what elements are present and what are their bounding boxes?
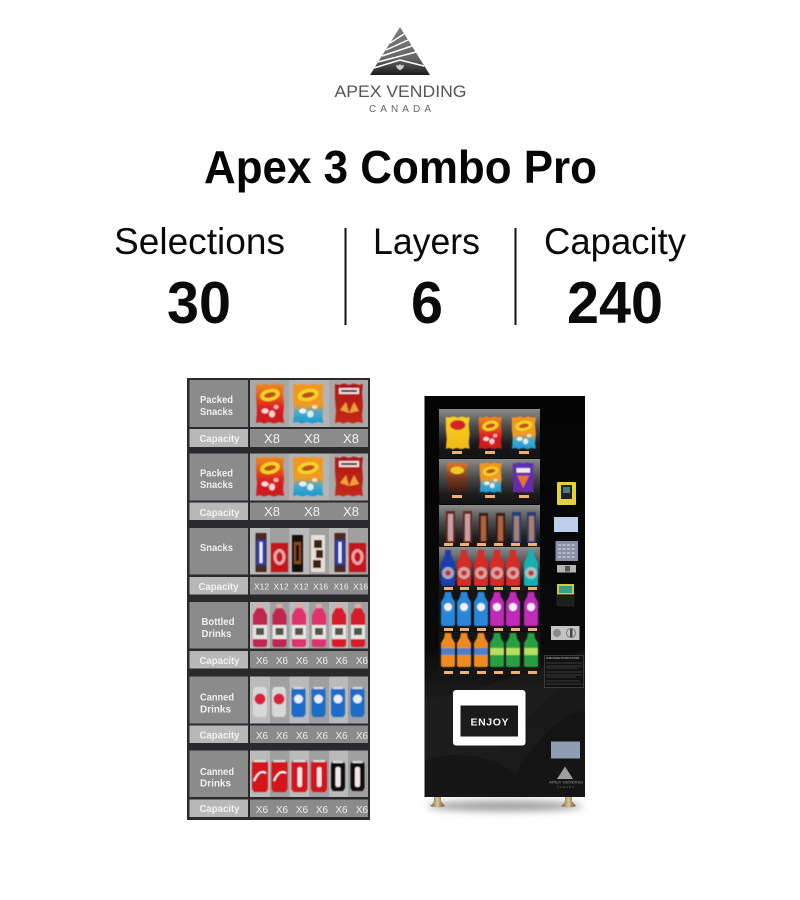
- row 4: bottled drinks: X6: [256, 656, 269, 667]
- row 4: bottled drinks: X6: [335, 656, 348, 667]
- row 6: canned drinks: X6: [276, 805, 289, 816]
- row 6: canned drinks: X6: [316, 805, 329, 816]
- shelf 3: bars: [439, 505, 540, 547]
- divider: [514, 228, 516, 325]
- row 6: canned drinks: X6: [356, 805, 369, 816]
- product window: [439, 409, 540, 675]
- stat: capacity: [544, 221, 686, 336]
- row 4: bottled drinks: X6: [356, 656, 369, 667]
- row 6: canned drinks: X6: [256, 805, 269, 816]
- row 4: bottled drinks: [190, 602, 369, 668]
- machine logo: CANADA: [557, 785, 574, 789]
- stat label: Selections: [114, 221, 285, 262]
- row 5: canned drinks: X6: [356, 731, 369, 742]
- row 2: packed snacks: X8: [264, 504, 280, 519]
- row 4: bottled drinks: X6: [296, 656, 309, 667]
- decorative panel curves: [425, 650, 585, 797]
- row 5: canned drinks: X6: [296, 731, 309, 742]
- icon: stepped mountain: [370, 27, 430, 75]
- row 6: canned drinks: Drinks: [200, 778, 231, 790]
- row 1: packed snacks: X8: [343, 431, 359, 446]
- enjoy panel: [453, 690, 526, 746]
- row 5: canned drinks: X6: [256, 731, 269, 742]
- row 5: canned drinks: Drinks: [200, 704, 231, 716]
- panel: planogram chart: [187, 378, 370, 820]
- row 4: bottled drinks: Drinks: [202, 628, 232, 640]
- purchase instructions: PURCHASE INSTRUCTIONS: [546, 657, 580, 660]
- title: Apex 3 Combo Pro: [204, 141, 597, 193]
- stat value: 240: [567, 270, 663, 336]
- row 4: bottled drinks: Bottled: [202, 616, 234, 628]
- control panel: [544, 482, 584, 688]
- coin mechanism: [551, 626, 580, 640]
- row 3: snacks: X16: [353, 582, 368, 592]
- logo wordmark: APEX VENDING: [334, 82, 466, 101]
- row 5: canned drinks: X6: [276, 731, 289, 742]
- row 5: canned drinks: [190, 676, 369, 743]
- enjoy panel: ENJOY: [470, 716, 508, 728]
- stat value: 6: [411, 270, 443, 336]
- row 5: canned drinks: X6: [316, 731, 329, 742]
- row 3: snacks: X16: [313, 582, 328, 592]
- small display: [557, 584, 574, 606]
- row 3: snacks: Snacks: [200, 542, 233, 554]
- row 3: snacks: [190, 528, 368, 594]
- row 3: snacks: X12: [293, 582, 309, 592]
- row 4: bottled drinks: Capacity: [200, 655, 240, 667]
- row 5: canned drinks: Canned: [200, 692, 234, 704]
- stat label: Layers: [373, 221, 480, 262]
- shelf 5: pepsi cans: [439, 590, 540, 631]
- logo: Apex Vending Canada: [334, 27, 466, 115]
- row 6: canned drinks: Capacity: [200, 803, 240, 815]
- row 5: canned drinks: X6: [335, 731, 348, 742]
- shelf 2: bags: [439, 459, 540, 504]
- machine feet: [430, 797, 576, 808]
- row 2: packed snacks: Packed: [200, 468, 233, 480]
- shelf 4: sports drinks: [439, 547, 540, 590]
- machine shadow: [427, 801, 583, 811]
- row 1: packed snacks: X8: [304, 431, 320, 446]
- row 1: packed snacks: Snacks: [200, 406, 233, 418]
- shelf 1: bags: [439, 409, 540, 458]
- machine logo: [549, 766, 583, 789]
- row 2: packed snacks: X8: [304, 504, 320, 519]
- row 2: packed snacks: Capacity: [200, 507, 240, 519]
- row 6: canned drinks: X6: [296, 805, 309, 816]
- row 1: packed snacks: [190, 380, 368, 447]
- row 3: snacks: X12: [254, 582, 269, 592]
- row 4: bottled drinks: X6: [276, 656, 289, 667]
- stat label: Capacity: [544, 221, 686, 262]
- row 1: packed snacks: X8: [264, 431, 280, 446]
- shelf 6: soda bottles: [439, 632, 540, 675]
- row 2: packed snacks: X8: [343, 504, 359, 519]
- machine body: [424, 396, 585, 797]
- stat: layers: [373, 221, 480, 336]
- row 1: packed snacks: Packed: [200, 394, 233, 406]
- pickup flap: [551, 742, 580, 758]
- stat: selections: [114, 221, 285, 336]
- info screen: [554, 517, 578, 532]
- row 2: packed snacks: [190, 454, 368, 520]
- row 3: snacks: X16: [333, 582, 349, 592]
- logo subtitle: CANADA: [369, 104, 431, 115]
- keypad: [556, 541, 578, 561]
- stat value: 30: [167, 270, 231, 336]
- machine logo: APEX VENDING: [549, 780, 583, 784]
- row 2: packed snacks: Snacks: [200, 479, 233, 491]
- card slot: [557, 565, 576, 572]
- row 4: bottled drinks: X6: [316, 656, 329, 667]
- divider: [344, 228, 346, 325]
- row 3: snacks: X12: [273, 582, 289, 592]
- vending machine: [424, 396, 585, 811]
- purchase instructions: [544, 656, 584, 688]
- row 6: canned drinks: Canned: [200, 766, 234, 778]
- card reader: [557, 482, 576, 505]
- row 3: snacks: Capacity: [198, 581, 239, 593]
- row 1: packed snacks: Capacity: [200, 433, 240, 445]
- row 6: canned drinks: [190, 750, 369, 817]
- row 5: canned drinks: Capacity: [200, 730, 240, 742]
- row 6: canned drinks: X6: [335, 805, 348, 816]
